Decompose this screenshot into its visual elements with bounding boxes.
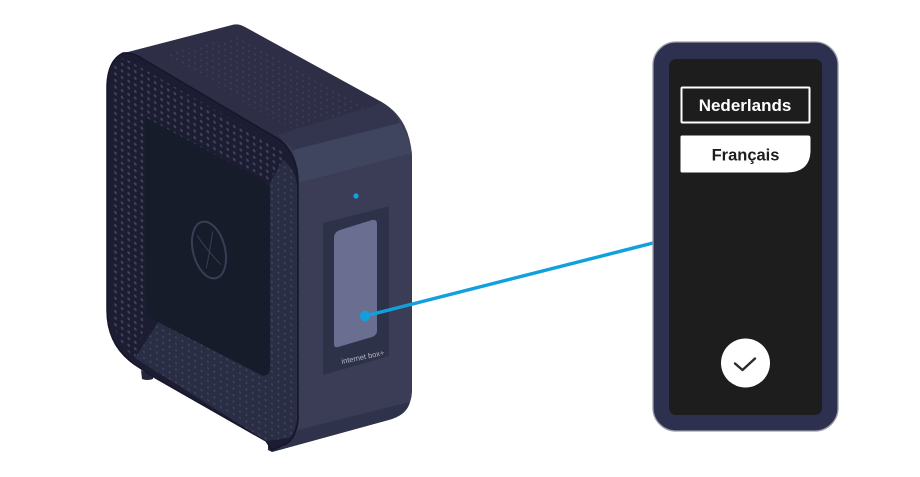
display surround [323,207,389,375]
front lighter band dot grille [135,160,297,441]
router device [107,24,412,452]
router right face [272,103,412,452]
router feet [141,370,285,452]
front face bottom lighter band [135,322,296,441]
confirm button [721,338,770,388]
device label: internet box+ [341,348,386,366]
front face dot grille [112,58,284,358]
screen surface [669,59,822,415]
front face right lighter band [264,160,297,441]
right face highlight band [293,123,412,183]
top face dot grille [160,37,365,128]
front face dark centre panel [145,117,270,375]
right face lower shade band [272,402,410,452]
router front face [107,53,298,450]
right face upper shade band [277,103,400,150]
router logo [186,218,232,282]
status LED [353,193,359,199]
button: Nederlands [682,88,810,122]
connector line [360,243,653,321]
button: Français: Français [712,146,779,164]
screen bezel [653,42,838,431]
display screen [334,220,377,347]
enlarged screen panel [653,42,838,431]
router top face [120,24,392,165]
button: Nederlands: Nederlands [699,96,791,115]
button: Français [680,136,810,172]
